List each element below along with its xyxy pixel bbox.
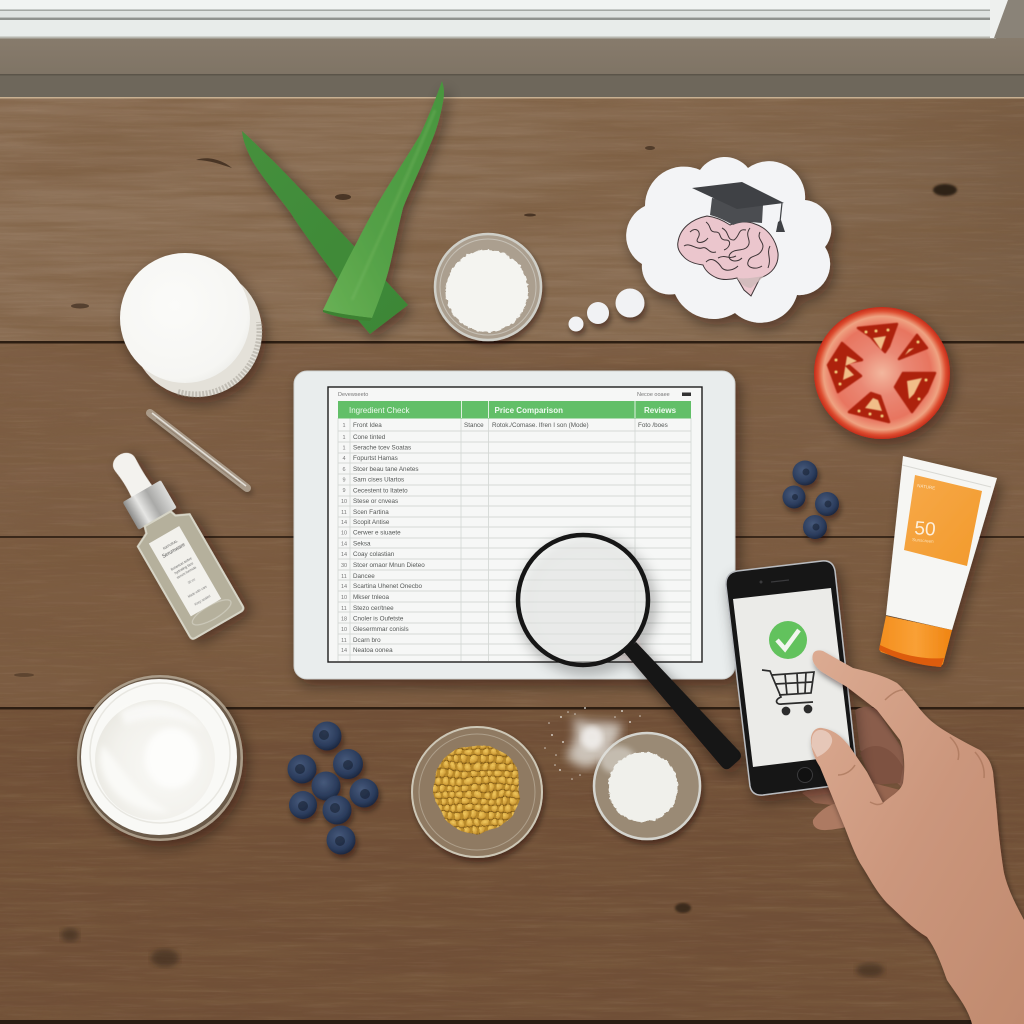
spreadsheet row text: Stcer beau tane Anetes [353, 466, 418, 473]
spreadsheet row text: Mkser tnleoa [353, 594, 390, 601]
row numbers: 11 [341, 606, 347, 612]
green table header: Ingredient Check [349, 406, 410, 415]
small blueberry cluster [782, 460, 839, 539]
spreadsheet row text: Scartina Uhenet Onecbo [353, 583, 422, 590]
row numbers: 1 [342, 435, 346, 441]
green check badge [769, 621, 807, 659]
row numbers: 6 [342, 467, 346, 473]
smartphone with shopping cart [726, 561, 857, 795]
phone body [726, 561, 857, 795]
row numbers: 10 [341, 595, 347, 601]
spreadsheet row text: Scopit Antise [353, 519, 390, 526]
row numbers: 14 [341, 648, 347, 654]
row numbers: 14 [341, 584, 347, 590]
phone speaker and camera [760, 580, 789, 584]
thought cloud with brain and graduation cap [626, 157, 831, 323]
tablet with comparison spreadsheet [294, 371, 735, 679]
orange label [904, 475, 982, 566]
row numbers: 11 [341, 574, 347, 580]
bottle label: Keep sealed [194, 594, 211, 607]
cream jar [77, 675, 243, 841]
silver collar [123, 480, 177, 530]
screen top bar [338, 392, 691, 398]
phone screen [733, 588, 851, 767]
tomato pale pulp and seeds [834, 328, 928, 418]
hand tapping the phone [811, 650, 1024, 1024]
bottle label: 30 ml [187, 578, 196, 585]
lens [518, 535, 648, 665]
row numbers: 30 [341, 563, 347, 569]
screen top bar: Necoe ooaee [637, 392, 670, 398]
spreadsheet row text: Seksa [353, 540, 371, 548]
row numbers [341, 423, 347, 654]
spreadsheet row text: Dancee [353, 573, 375, 580]
green table header: Reviews [644, 406, 677, 415]
wood knots and marks [14, 146, 957, 977]
spreadsheet row text: Cnoler is Oufetste [353, 616, 404, 622]
row numbers: 11 [341, 638, 347, 644]
tube body [886, 456, 997, 630]
tablet screen [328, 387, 702, 662]
spreadsheet row text: Glesermmar conisls [353, 626, 409, 633]
spreadsheet row text: Stezo cer/tnee [353, 605, 394, 612]
sunscreen tube: NATURE [917, 483, 936, 491]
spreadsheet row text: Serache tcev Soatas [353, 444, 411, 452]
screen top bar: Devewseeto [338, 392, 368, 398]
spreadsheet row text: Stese or cnveas [353, 498, 398, 505]
bottle label [149, 526, 221, 616]
row numbers: 10 [341, 530, 347, 536]
spreadsheet row text: Cecestent to Itateto [353, 488, 408, 494]
row numbers: 10 [341, 627, 347, 633]
row numbers: 14 [341, 520, 347, 526]
glass body [131, 504, 245, 640]
spreadsheet row text: Coay colastian [353, 551, 395, 558]
spreadsheet row text [353, 422, 668, 654]
bottle label: serum formula [176, 565, 197, 580]
sliced tomato [814, 307, 950, 439]
sunscreen tube: 50 [914, 518, 936, 541]
fingers behind the phone [802, 706, 905, 830]
spreadsheet row text: Cerwer e siuaete [353, 530, 401, 536]
aloe vera leaves [242, 81, 444, 334]
handle [624, 642, 741, 769]
shopping cart icon [762, 670, 814, 714]
spreadsheet row text: Neatoa oonea [353, 647, 393, 654]
tablet frame [294, 371, 735, 679]
left aloe leaf [242, 131, 408, 334]
row numbers: 18 [341, 616, 347, 622]
graduation cap [692, 182, 785, 232]
right aloe leaf [323, 81, 444, 318]
row numbers: 9 [342, 488, 346, 494]
glass pipette [150, 413, 247, 488]
spreadsheet row text: Stcer omaor Mnun Dieteo [353, 562, 425, 569]
spreadsheet row text: Scen Fartina [353, 509, 389, 516]
row numbers: 10 [341, 499, 347, 505]
sunscreen tube [879, 456, 997, 667]
glass bowl of white powder [594, 733, 700, 839]
spreadsheet grid [338, 418, 691, 661]
spreadsheet row text: Cone tinted [353, 434, 386, 441]
dropper bulb [109, 448, 153, 499]
brain [678, 216, 778, 296]
glass dish with coarse salt [435, 234, 541, 340]
spreadsheet row text: Dcarn bro [353, 637, 381, 644]
orange cap [880, 616, 952, 666]
row numbers: 1 [342, 423, 346, 429]
window frame and wall [0, 0, 1024, 97]
thumbnail [812, 730, 832, 757]
tomato seed chambers [828, 324, 935, 422]
bottle label: hydrating face [174, 561, 194, 575]
jar side with printed label [132, 267, 262, 397]
spreadsheet row text: Front Idea [353, 422, 382, 429]
row numbers: 1 [342, 446, 346, 452]
spreadsheet row text: Rotok./Comase. Ifren I son (Mode) [492, 422, 589, 429]
home button [798, 768, 812, 782]
bottle label: NATURAL [162, 539, 179, 551]
row numbers: 14 [341, 552, 347, 558]
magnifying glass [518, 535, 741, 769]
bottle label: Made with care [187, 584, 208, 599]
bottle label: Botanical active [170, 556, 193, 572]
knuckle creases [838, 690, 984, 805]
green table header [338, 401, 691, 418]
spreadsheet row text: Foto /boes [638, 422, 668, 429]
large blueberry cluster [288, 722, 378, 854]
bottle label: Serumware [161, 542, 187, 560]
thought bubble dots [568, 288, 644, 332]
sunscreen tube: Sunscreen [912, 537, 934, 544]
serum dropper bottle [94, 439, 245, 640]
spreadsheet row text: Fopurtst Hamas [353, 455, 398, 462]
row numbers: 14 [341, 542, 347, 548]
row numbers: 11 [341, 510, 347, 516]
row numbers: 4 [342, 456, 346, 462]
glass bowl of golden seeds [412, 727, 542, 857]
spreadsheet row text: Sarn cises Ulartos [353, 476, 404, 484]
paper cloud [626, 157, 831, 323]
scattered powder [544, 707, 641, 780]
white jar lid [120, 253, 262, 397]
green table header: Price Comparison [494, 406, 563, 415]
spreadsheet row text: Stance [464, 422, 484, 429]
row numbers: 9 [342, 478, 346, 484]
